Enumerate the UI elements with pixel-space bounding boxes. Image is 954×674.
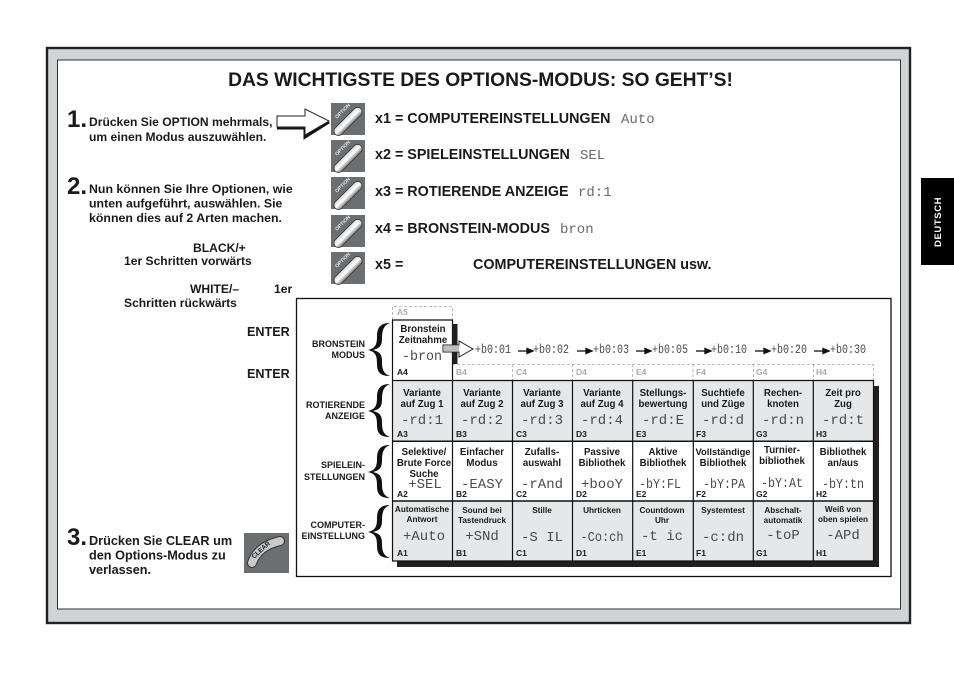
dashed placeholders xyxy=(392,306,874,380)
row 2 cells: -bY:FL xyxy=(639,477,681,493)
arrow: step 1 to option button xyxy=(277,109,329,137)
row 1 cells: F1 xyxy=(696,548,706,558)
icon: option button 5: OPTION xyxy=(334,251,352,269)
cell A4 xyxy=(397,324,448,377)
row 2 cells: E2 xyxy=(636,489,647,499)
row 3 cells: -rd:1 xyxy=(401,413,443,429)
row 3 cells: auf Zug 4 xyxy=(580,399,624,410)
placeholder labels: A5 xyxy=(397,307,408,317)
row 2 cells: Zufalls- xyxy=(525,447,559,458)
brace: rotierende xyxy=(368,384,390,437)
mode list xyxy=(375,111,712,273)
row 2 cells: Suche xyxy=(409,469,439,480)
row 3 cells: A3 xyxy=(397,429,408,439)
bronstein time values: +b0:30 xyxy=(830,342,866,357)
row 3 cells: auf Zug 3 xyxy=(520,399,564,410)
title: DAS WICHTIGSTE DES OPTIONS-MODUS: SO GEHT’S! xyxy=(228,70,733,91)
row 3 cells: auf Zug 1 xyxy=(400,399,444,410)
page frame xyxy=(47,48,910,623)
row 2 cells: Bibliothek xyxy=(640,458,687,469)
row 2 cells: A2 xyxy=(397,489,408,499)
row 3 cells: -rd:2 xyxy=(461,413,503,429)
row 1 cells: -S IL xyxy=(521,530,563,546)
row 1 cells: Stille xyxy=(532,506,552,515)
row 3 cells: Variante xyxy=(463,388,501,399)
row 2 cells: D2 xyxy=(576,489,587,499)
placeholder labels: B4 xyxy=(456,367,467,377)
brace: computer xyxy=(368,505,390,558)
row 1 cells: -APd xyxy=(826,528,860,544)
row 3 cells: und Züge xyxy=(701,399,745,410)
time arrows xyxy=(518,348,829,354)
row 1 cells: -Co:ch xyxy=(580,530,624,546)
row 1 cells: Uhr xyxy=(655,516,670,525)
shaded rows xyxy=(392,380,873,561)
mode list: SEL xyxy=(580,148,605,164)
row 2 cells: Aktive xyxy=(648,447,678,458)
bronstein time values: +b0:10 xyxy=(711,342,747,357)
row 3 cells: B3 xyxy=(456,429,467,439)
row 3 cells: knoten xyxy=(767,399,799,410)
row 2 cells: -bY:PA xyxy=(703,477,745,493)
step 2: WHITE/– xyxy=(190,282,239,296)
row 2 cells: Einfacher xyxy=(460,447,504,458)
row 1 cells: +Auto xyxy=(403,529,445,545)
row 1 cells: oben spielen xyxy=(818,515,868,524)
step 1: 1. xyxy=(67,106,87,133)
row 1 cells: Sound bei xyxy=(462,506,502,515)
row 3 cells: Stellungs- xyxy=(640,388,686,399)
cell A4: Zeitnahme xyxy=(399,335,448,346)
placeholder labels: C4 xyxy=(516,367,527,377)
row 1 cells: Weiß von xyxy=(825,505,861,514)
row 1 cells xyxy=(395,505,868,558)
row 3 cells: Rechen- xyxy=(764,388,802,399)
row 1 cells: automatik xyxy=(764,516,803,525)
row 2 cells: bibliothek xyxy=(759,456,805,467)
placeholder labels: F4 xyxy=(696,367,706,377)
row 2 cells: Bibliothek xyxy=(820,447,867,458)
row 2 cells: C2 xyxy=(516,489,527,499)
row 1 cells: H1 xyxy=(816,548,827,558)
mode list: COMPUTEREINSTELLUNGEN usw. xyxy=(473,257,712,273)
row 3 cells: Zeit pro xyxy=(825,388,861,399)
row 2 cells: Brute Force xyxy=(397,458,452,469)
row 3 cells: -rd:t xyxy=(822,413,864,429)
row 3 cells: auf Zug 2 xyxy=(460,399,504,410)
row 1 cells: Systemtest xyxy=(701,506,745,515)
row 1 cells: Tastendruck xyxy=(458,516,506,525)
row 1 cells: C1 xyxy=(516,548,527,558)
step 2: 1er xyxy=(274,282,292,296)
placeholder labels: H4 xyxy=(816,367,827,377)
step 1 xyxy=(67,106,272,144)
mode list: x2 = SPIELEINSTELLUNGEN xyxy=(375,147,570,163)
row 3 cells: Suchtiefe xyxy=(701,388,745,399)
row labels: SPIELEIN- xyxy=(321,460,365,470)
cell A4: Bronstein xyxy=(400,324,446,335)
row 2 cells: an/aus xyxy=(828,458,858,469)
bronstein time values: +b0:03 xyxy=(593,342,629,357)
row 3 cells: Variante xyxy=(403,388,441,399)
row 1 cells: -toP xyxy=(766,528,800,544)
icon: option button 3: OPTION xyxy=(334,176,352,194)
step 2: ENTER xyxy=(247,325,290,339)
row 3 cells: -rd:n xyxy=(762,413,804,429)
row 3 cells: H3 xyxy=(816,429,827,439)
row 3 cells: -rd:3 xyxy=(521,413,563,429)
row 3 cells: C3 xyxy=(516,429,527,439)
step 2: ENTER xyxy=(247,367,290,381)
row 3 cells: -rd:d xyxy=(702,413,744,429)
mode list: x5 = xyxy=(375,257,403,273)
step 2: 1er Schritten vorwärts xyxy=(124,254,252,268)
row 3 cells: G3 xyxy=(756,429,768,439)
row 2 cells: -rAnd xyxy=(521,477,563,493)
bronstein time values xyxy=(475,342,866,357)
placeholder labels: D4 xyxy=(576,367,587,377)
row 1 cells: G1 xyxy=(756,548,768,558)
row 2 cells: -bY:At xyxy=(761,476,803,492)
mode list: rd:1 xyxy=(578,185,612,201)
row labels: ROTIERENDE xyxy=(306,400,365,410)
row 2 cells xyxy=(397,445,867,499)
row 3 cells: bewertung xyxy=(639,399,688,410)
row 1 cells: A1 xyxy=(397,548,408,558)
step 2: 2. xyxy=(67,173,87,200)
tab: language xyxy=(921,178,954,265)
row 2 cells: H2 xyxy=(816,489,827,499)
placeholder labels: G4 xyxy=(756,367,768,377)
icon: option button 3 xyxy=(331,176,365,211)
step 2: Nun können Sie Ihre Optionen, wie xyxy=(89,182,293,196)
row 3 cells: Zug xyxy=(834,399,852,410)
row 1 cells: B1 xyxy=(456,548,467,558)
step 3: verlassen. xyxy=(89,563,151,577)
step 1: Drücken Sie OPTION mehrmals, xyxy=(89,115,272,129)
row 1 cells: Countdown xyxy=(639,506,685,515)
row 2 cells: G2 xyxy=(756,489,768,499)
bronstein time values: +b0:20 xyxy=(771,342,807,357)
row 2 cells: -EASY xyxy=(461,477,504,493)
row 2 cells: +SEL xyxy=(408,477,442,493)
step 3: 3. xyxy=(67,524,87,551)
step 3: Drücken Sie CLEAR um xyxy=(89,534,232,548)
row labels xyxy=(301,339,365,541)
step 3: den Options-Modus zu xyxy=(89,548,226,562)
step 2 xyxy=(67,173,293,381)
arrow: A4 to time values xyxy=(443,341,473,357)
row 3 cells: Variante xyxy=(583,388,621,399)
row 1 cells: +SNd xyxy=(465,529,499,545)
row 2 cells: Modus xyxy=(466,458,498,469)
row 3 cells xyxy=(397,388,864,439)
row labels: MODUS xyxy=(332,350,365,360)
row 2 cells: Turnier- xyxy=(764,445,800,456)
row labels: BRONSTEIN xyxy=(312,339,365,349)
row 1 cells: -t ic xyxy=(641,529,683,545)
cell A4: A4 xyxy=(397,367,408,377)
row 1 cells: Antwort xyxy=(407,515,438,524)
mode list: x4 = BRONSTEIN-MODUS xyxy=(375,221,550,237)
brace: bronstein xyxy=(368,323,390,376)
row 1 cells: D1 xyxy=(576,548,587,558)
icon: option button 4 xyxy=(331,214,365,249)
placeholder labels: E4 xyxy=(636,367,647,377)
step 2: können dies auf 2 Arten machen. xyxy=(89,211,282,225)
icon: clear button xyxy=(244,533,289,573)
bronstein time values: +b0:02 xyxy=(533,342,569,357)
row 2 cells: Passive xyxy=(584,447,621,458)
icon: option button 5 xyxy=(331,251,365,286)
row 1 cells: Uhrticken xyxy=(583,506,621,515)
row 3 cells: Variante xyxy=(523,388,561,399)
row 2 cells: +booY xyxy=(581,477,624,493)
inner white panel xyxy=(58,60,900,609)
cell A4: -bron xyxy=(402,349,442,365)
tab: language: DEUTSCH xyxy=(933,197,944,247)
icon: option button 2: OPTION xyxy=(334,139,352,157)
row 3 cells: -rd:E xyxy=(642,413,684,429)
table shadow xyxy=(397,386,879,567)
mode list: x3 = ROTIERENDE ANZEIGE xyxy=(375,184,569,200)
row 3 cells: F3 xyxy=(696,429,706,439)
table grid xyxy=(392,320,874,561)
bronstein time values: +b0:05 xyxy=(652,342,688,357)
row labels: EINSTELLUNG xyxy=(301,531,365,541)
step 1: um einen Modus auszuwählen. xyxy=(89,130,266,144)
row 2 cells: -bY:tn xyxy=(822,477,864,493)
icon: option button 1: OPTION xyxy=(334,102,352,120)
placeholder labels xyxy=(397,307,827,377)
row 3 cells: -rd:4 xyxy=(581,413,623,429)
row labels: ANZEIGE xyxy=(325,411,365,421)
row 2 cells: Bibliothek xyxy=(700,458,747,469)
step 3 xyxy=(67,524,232,577)
row 2 cells: Vollständige xyxy=(695,446,751,457)
row 1 cells: Automatische xyxy=(395,505,450,514)
icon: option button 1 xyxy=(331,102,365,137)
row 2 cells: F2 xyxy=(696,489,706,499)
mode list: bron xyxy=(560,222,594,238)
mode list: Auto xyxy=(621,112,655,128)
row 2 cells: B2 xyxy=(456,489,467,499)
bar beside A4 xyxy=(452,324,458,364)
icon: option button 4: OPTION xyxy=(334,214,352,232)
step 2: Schritten rückwärts xyxy=(124,296,237,310)
mode list: x1 = COMPUTEREINSTELLUNGEN xyxy=(375,111,611,127)
panel: options table xyxy=(296,298,891,576)
brace: spielein xyxy=(368,445,390,498)
row 3 cells: D3 xyxy=(576,429,587,439)
icon: clear button: CLEAR xyxy=(251,540,272,560)
row 1 cells: E1 xyxy=(636,548,647,558)
row 1 cells: -c:dn xyxy=(702,530,744,546)
step 2: BLACK/+ xyxy=(193,241,246,255)
row 2 cells: auswahl xyxy=(523,458,561,469)
row labels: COMPUTER- xyxy=(310,520,365,530)
row labels: STELLUNGEN xyxy=(304,472,365,482)
row 1 cells: Abschalt- xyxy=(764,506,802,515)
row 3 cells: E3 xyxy=(636,429,647,439)
row 2 cells: Bibliothek xyxy=(579,458,626,469)
icon: option button 2 xyxy=(331,139,365,174)
bronstein time values: +b0:01 xyxy=(475,342,511,357)
step 2: unten aufgeführt, auswählen. Sie xyxy=(89,196,283,210)
row 2 cells: Selektive/ xyxy=(402,447,447,458)
